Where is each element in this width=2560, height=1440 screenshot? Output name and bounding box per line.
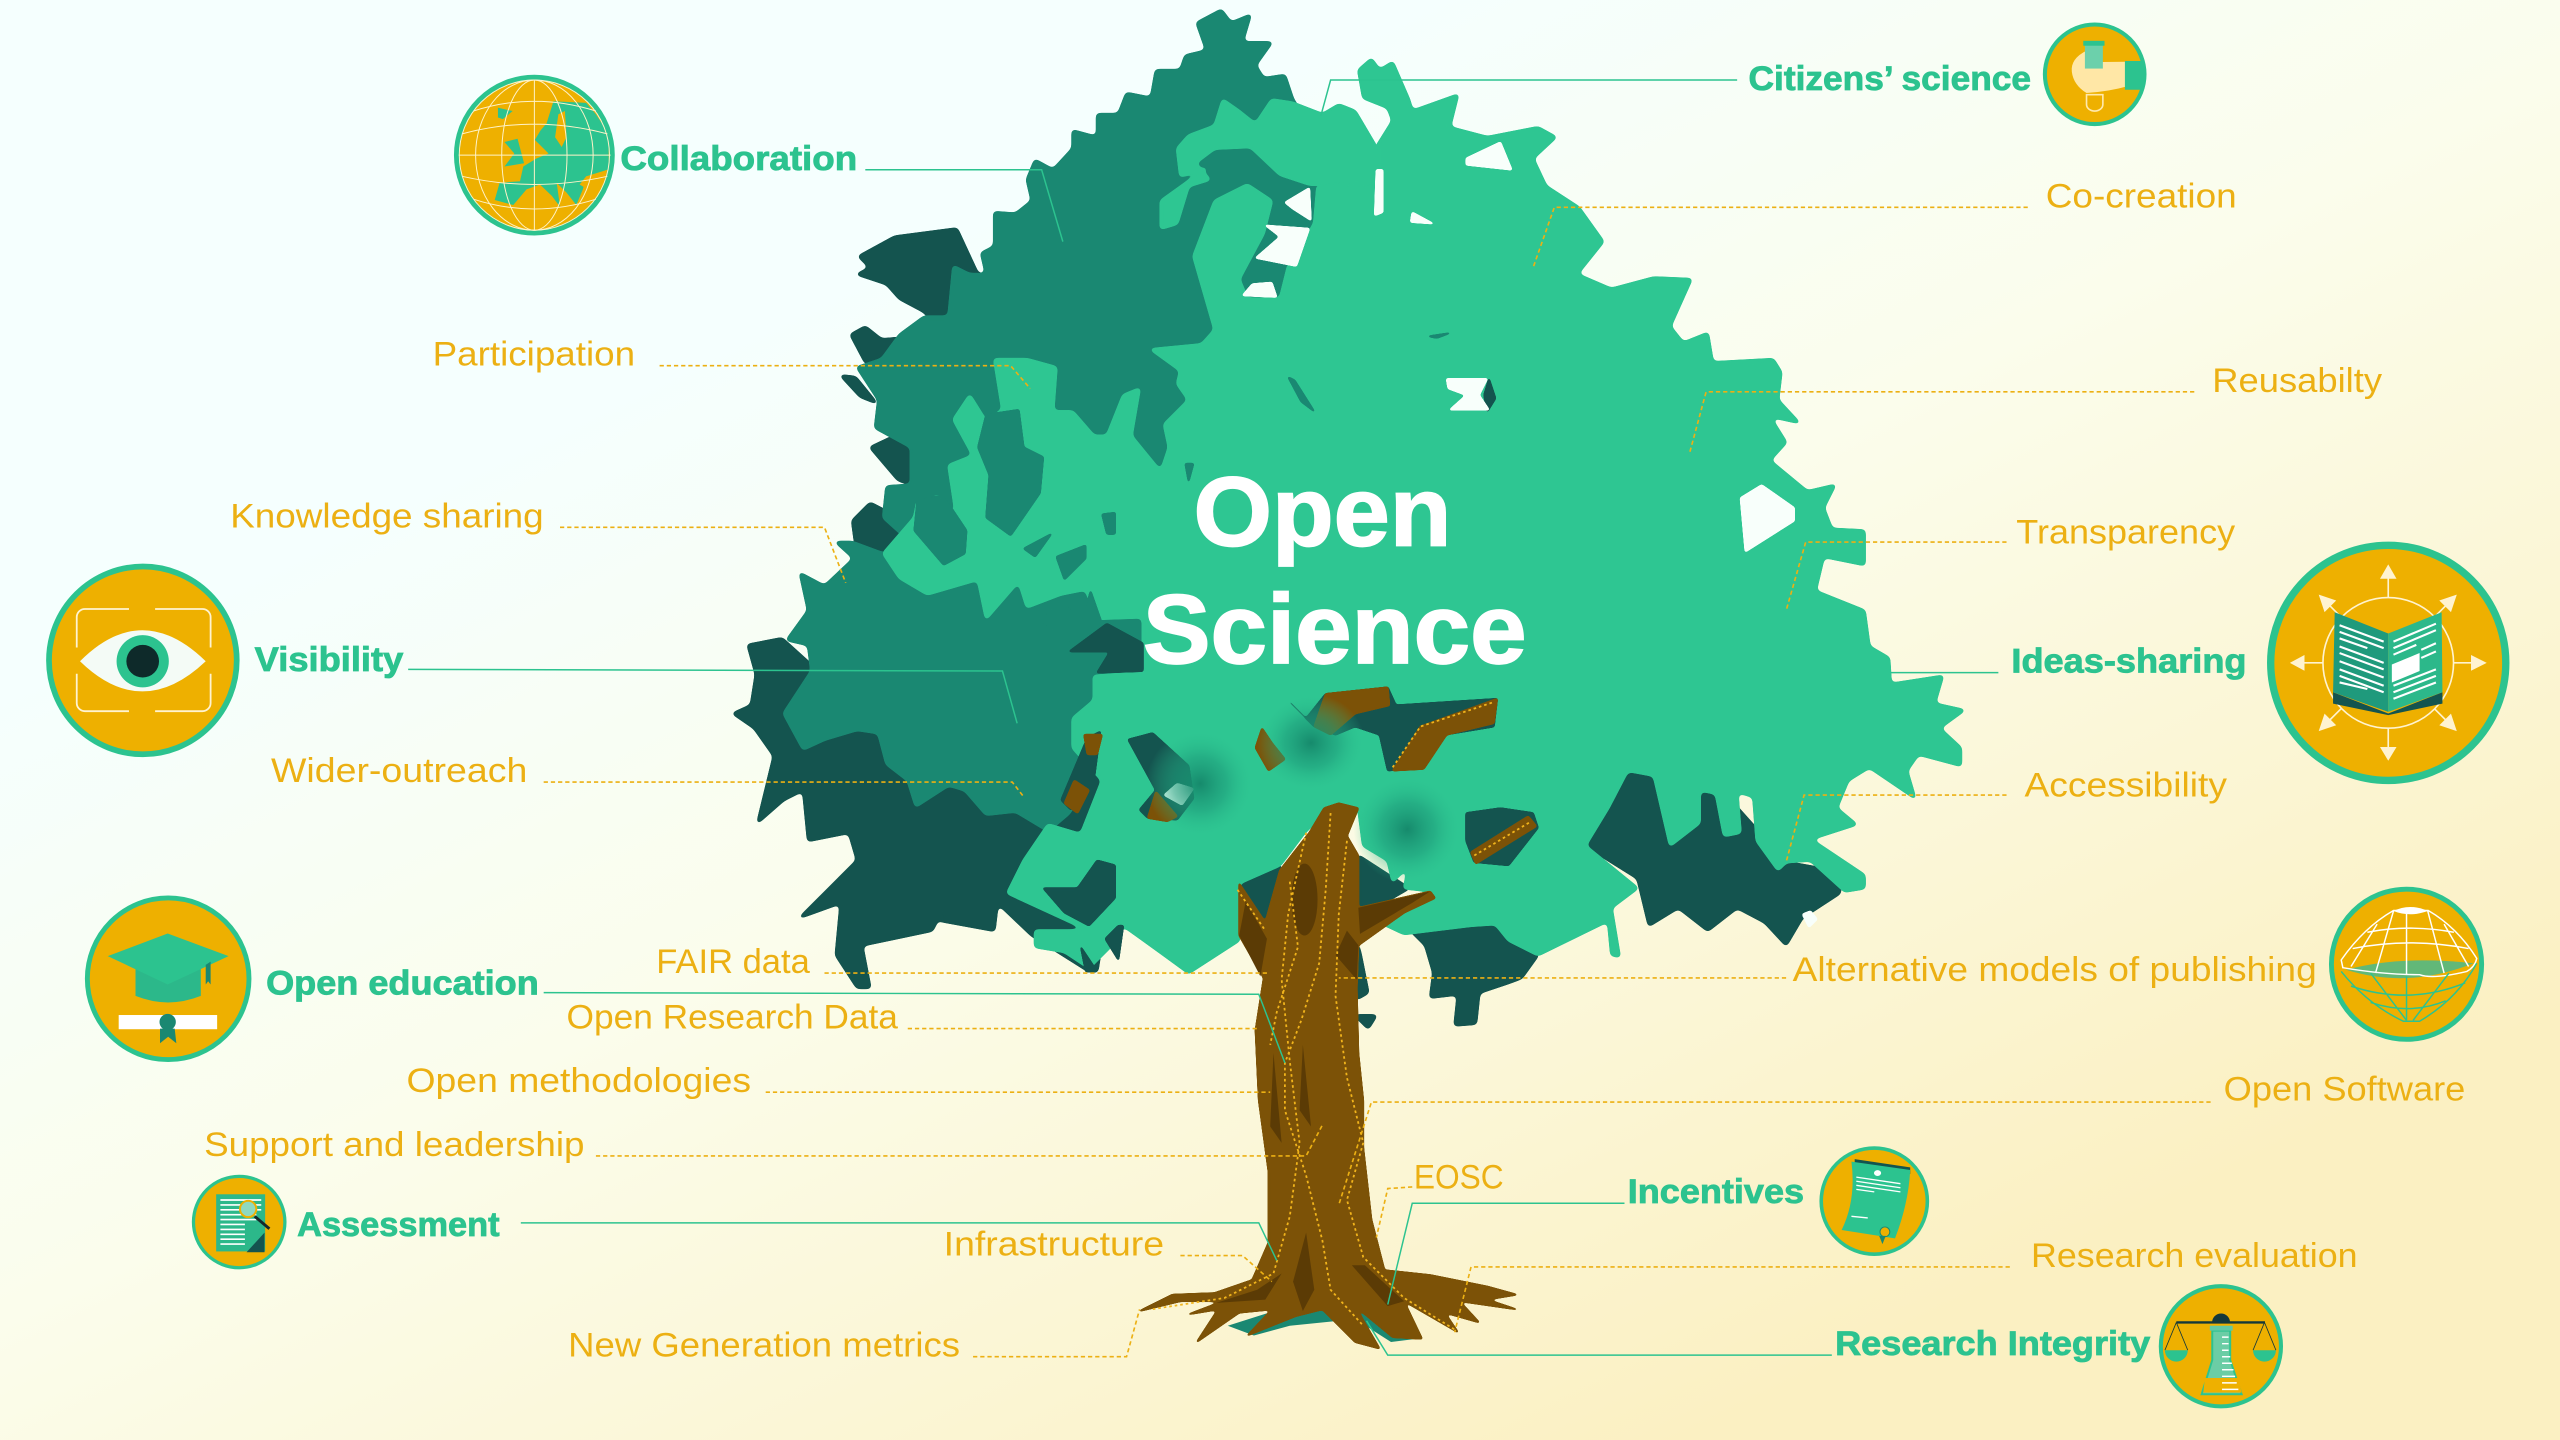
labels: Accessibility <box>2024 767 2228 805</box>
labels: Transparency <box>2016 514 2236 552</box>
labels: EOSC <box>1414 1159 1504 1197</box>
dotted leader lines <box>544 207 2211 1357</box>
branches in canopy gaps <box>1064 687 1536 864</box>
labels: Open Software <box>2224 1070 2465 1108</box>
labels: Incentives <box>1628 1173 1804 1211</box>
title: Open <box>1193 456 1451 566</box>
bark shading <box>1216 864 1430 1311</box>
icon: globe net <box>2331 889 2482 1039</box>
icon: scales and flask <box>2161 1286 2281 1406</box>
labels: FAIR data <box>656 943 811 981</box>
labels: Wider-outreach <box>271 752 527 790</box>
icon: eye <box>49 567 237 754</box>
labels: Research evaluation <box>2031 1237 2358 1275</box>
labels: Assessment <box>297 1206 500 1244</box>
tree <box>733 10 1964 1349</box>
labels: Support and leadership <box>204 1126 584 1164</box>
canopy shadows <box>1146 694 1461 883</box>
labels: Infrastructure <box>944 1226 1164 1264</box>
solid leader lines <box>408 80 1998 1355</box>
trunk dotted lines <box>1151 702 1531 1331</box>
labels: Research Integrity <box>1835 1325 2150 1363</box>
icon: document with magnifier <box>193 1176 285 1268</box>
icon: graduation cap <box>87 898 249 1060</box>
trunk <box>1140 803 1517 1349</box>
root shadow <box>1228 1306 1417 1342</box>
labels: Knowledge sharing <box>230 497 544 535</box>
icon: Europe globe <box>457 78 612 233</box>
canopy gaps <box>1164 142 1817 927</box>
labels: Reusabilty <box>2212 362 2383 400</box>
labels: Open education <box>266 964 539 1002</box>
icon: open book with arrows <box>2271 545 2506 780</box>
canopy: upper arch <box>1161 100 1376 229</box>
labels: Ideas-sharing <box>2011 643 2247 681</box>
icon: certificate <box>1821 1148 1927 1254</box>
labels: Visibility <box>255 641 403 679</box>
title: Science <box>1143 574 1527 684</box>
canopy: dark pockets <box>1043 379 1538 971</box>
labels: Participation <box>433 336 635 374</box>
labels: Citizens’ science <box>1749 60 2031 98</box>
labels: Open methodologies <box>407 1062 751 1100</box>
canopy: mid layer <box>784 10 1355 831</box>
icon: test tube in hand <box>2045 24 2145 124</box>
canopy: light layer <box>883 59 1964 973</box>
labels: Alternative models of publishing <box>1793 951 2317 989</box>
labels: Co-creation <box>2046 177 2237 215</box>
labels: Open Research Data <box>567 999 899 1037</box>
canopy: dark layer <box>733 229 1840 1029</box>
labels: Collaboration <box>620 140 857 178</box>
title <box>1143 456 1527 684</box>
canopy: blobs <box>914 333 1450 647</box>
labels: New Generation metrics <box>568 1327 960 1365</box>
